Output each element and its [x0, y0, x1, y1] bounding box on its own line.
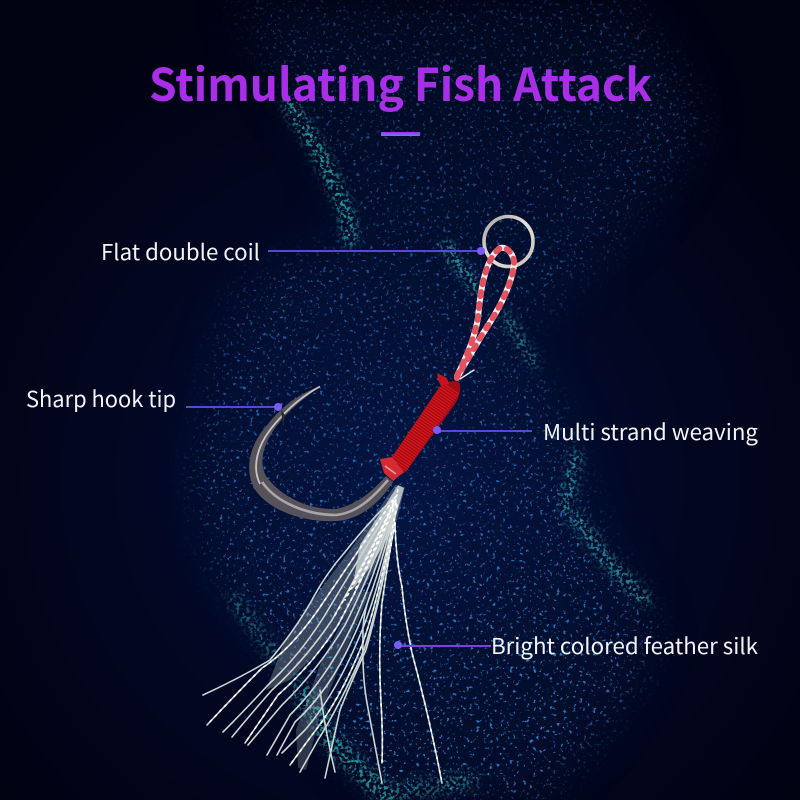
callout: Sharp hook tip: Sharp hook tip: [26, 382, 176, 414]
hook illustration: [203, 216, 533, 783]
title: Stimulating Fish Attack: [149, 49, 652, 114]
icon: split ring: [484, 216, 533, 266]
icon: silk feather strands: [203, 485, 442, 783]
title underline: [381, 132, 420, 136]
callout: Sharp hook tip: [26, 382, 282, 414]
callout: Multi strand weaving: [433, 415, 759, 447]
icon: red thread wrap: [380, 373, 460, 481]
icon: hook: [249, 386, 393, 521]
callout: Bright colored feather silk: Bright colored feather silk: [491, 629, 758, 661]
callout: Multi strand weaving: Multi strand weaving: [543, 415, 759, 447]
icon: braided loop: [457, 248, 514, 379]
callout: Flat double coil: [101, 235, 485, 267]
callout: Flat double coil: Flat double coil: [101, 235, 260, 267]
